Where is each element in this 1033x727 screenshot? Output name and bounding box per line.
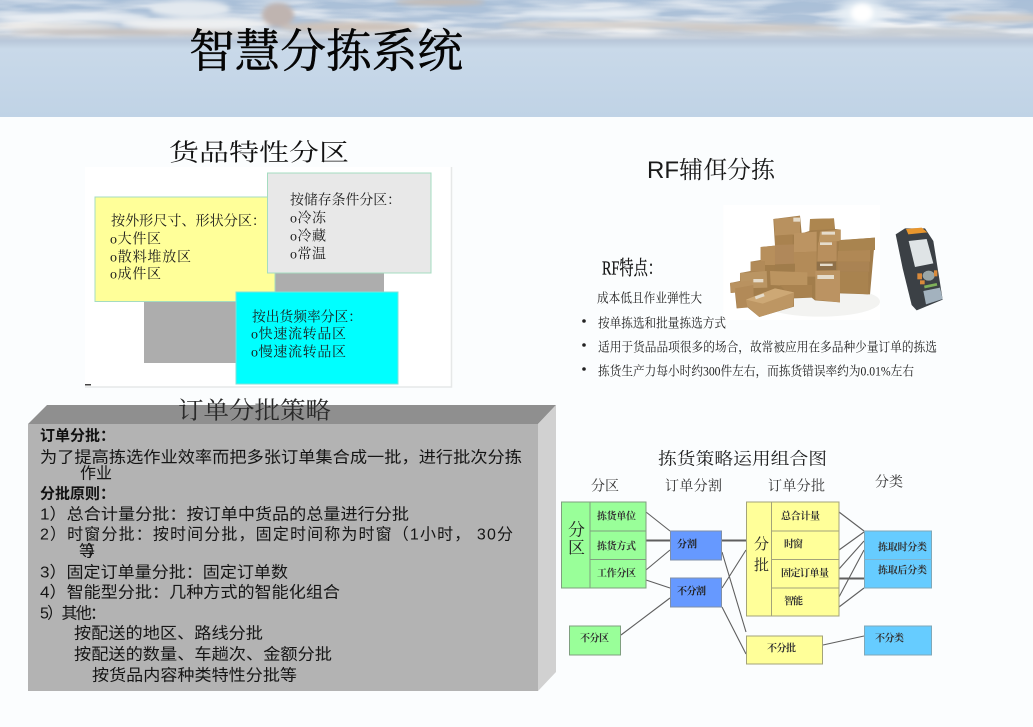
no sorting box: 不分类	[875, 632, 904, 644]
gray box: storage condition zoning: o冷冻	[290, 210, 327, 226]
batching body text: 分批原则：	[40, 484, 115, 502]
panel: order batching strategy	[28, 398, 556, 691]
green zoning group: 区	[568, 538, 585, 558]
yellow box: shape zoning: o散料堆放区	[110, 248, 191, 266]
batching body text: 等）	[79, 542, 104, 560]
no batching box: 不分批	[767, 642, 796, 654]
panel: goods zoning	[85, 140, 452, 387]
yellow batching group: 总合计量	[781, 510, 820, 522]
zoning diagram backing	[85, 167, 452, 387]
yellow batching group: 智能	[784, 594, 803, 608]
no split box	[670, 578, 722, 607]
gray box: storage condition zoning: o冷藏	[290, 228, 326, 244]
batching body text: 4）智能型分批：几种方式的智能化组合	[40, 584, 340, 602]
batching body text: 1）总合计量分批：按订单中货品的总量进行分批	[40, 506, 409, 524]
column headings	[591, 474, 903, 494]
batching heading: 订单分批策略	[178, 398, 331, 424]
yellow batching group: 时窗	[784, 538, 803, 550]
no sorting box	[864, 626, 932, 655]
column headings: 分类	[875, 474, 903, 490]
zoning heading: 货品特性分区	[169, 140, 349, 166]
batching body text: 5）其他：	[40, 604, 106, 622]
green zoning group: 工作分区	[597, 566, 636, 580]
diagram title: 拣货策略运用组合图	[658, 450, 827, 468]
3D block top face	[28, 405, 556, 424]
batching body text: 2）时窗分批：按时间分批，固定时间称为时窗（1小时， 30分	[40, 526, 513, 544]
RF heading: RF辅佴分拣	[647, 157, 776, 184]
green zoning group: 分	[568, 520, 585, 540]
gray box: storage condition zoning: o常温	[290, 246, 326, 262]
yellow batching group: 分	[754, 536, 769, 553]
cyan box: shipping frequency zoning: 按出货频率分区：	[252, 308, 362, 326]
3D block side face	[538, 405, 556, 691]
yellow batching group: 固定订单量	[781, 566, 829, 580]
panel: picking strategy combination diagram	[562, 450, 932, 664]
batching body text: 作业	[80, 464, 112, 482]
yellow box: shape zoning: o大件区	[110, 230, 161, 248]
gray box: storage condition zoning: 按储存条件分区：	[290, 192, 401, 208]
gray box: storage condition zoning	[268, 173, 431, 273]
dark gray central block	[144, 250, 384, 363]
batching body text: 为了提高拣选作业效率而把多张订单集合成一批，进行批次分拣	[40, 448, 522, 466]
column headings: 订单分批	[768, 478, 825, 494]
batching body text	[40, 426, 522, 684]
split box	[670, 531, 722, 560]
RF features list: 拣货生产力每小时约300件左右，而拣货错误率约为0.01%左右	[598, 364, 914, 380]
column headings: 分区	[591, 478, 619, 494]
yellow box: shape zoning: o成件区	[110, 266, 161, 282]
no zoning box	[570, 626, 620, 655]
batching body text: 按配送的数量、车趟次、金额分批	[74, 646, 332, 664]
yellow batching group	[746, 502, 839, 616]
blue sorting group	[864, 531, 932, 588]
yellow batching group: 批	[754, 557, 769, 574]
split box: 分割	[677, 538, 697, 550]
blue sorting group: 拣取时分类	[878, 540, 927, 554]
green zoning group	[562, 502, 646, 588]
panel: RF assisted picking	[582, 157, 943, 380]
cyan box: shipping frequency zoning	[236, 292, 398, 384]
title: 智慧分拣系统	[189, 26, 463, 77]
connector lines	[621, 512, 864, 654]
green zoning group: 拣货方式	[597, 540, 636, 552]
RF features list: 成本低且作业弹性大	[597, 290, 702, 306]
RF features list: 按单拣选和批量拣选方式	[598, 316, 726, 330]
illustration: RF handheld scanner	[896, 228, 943, 310]
column headings: 订单分割	[665, 478, 722, 494]
cyan box: shipping frequency zoning: o快速流转品区	[251, 326, 346, 342]
batching body text: 订单分批：	[40, 426, 115, 444]
no batching box	[746, 636, 822, 664]
RF features heading: RF特点：	[602, 256, 662, 280]
illustration: stacked cardboard boxes	[723, 205, 880, 320]
batching body text: 按配送的地区、路线分批	[74, 624, 263, 642]
no zoning box: 不分区	[580, 632, 609, 644]
yellow box: shape zoning	[95, 197, 275, 302]
batching body text: 按货品内容种类特性分批等	[92, 666, 297, 684]
3D block front face	[28, 424, 538, 691]
batching body text: 3）固定订单量分批：固定订单数	[40, 564, 288, 582]
blue sorting group: 拣取后分类	[878, 564, 927, 576]
RF features list: 适用于货品品项很多的场合，故常被应用在多品种少量订单的拣选	[598, 340, 937, 356]
no split box: 不分割	[677, 584, 706, 598]
RF features list	[582, 290, 937, 380]
cyan box: shipping frequency zoning: o慢速流转品区	[251, 344, 346, 360]
yellow box: shape zoning: 按外形尺寸、形状分区：	[111, 212, 266, 230]
green zoning group: 拣货单位	[597, 510, 636, 522]
header sky banner	[0, 0, 1033, 117]
